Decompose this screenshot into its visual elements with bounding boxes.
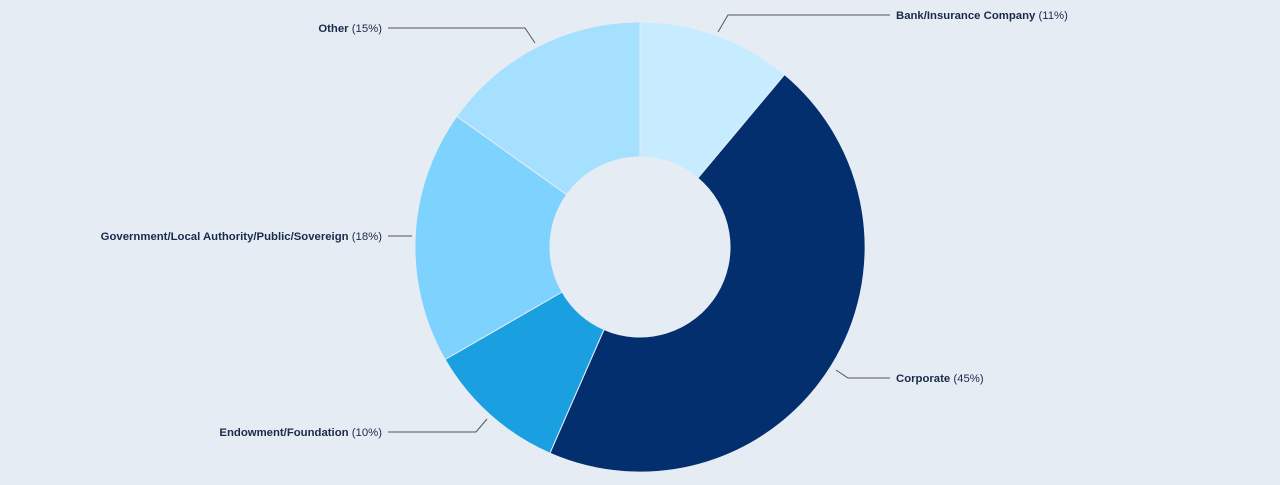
slice: Bank/Insurance Company	[640, 22, 785, 178]
slice: Other	[457, 22, 640, 195]
slice: Corporate	[550, 75, 865, 472]
label: Other: Other (15%)	[318, 23, 382, 35]
leader lines	[388, 15, 890, 432]
labels	[101, 10, 1068, 439]
label: Bank/Insurance Company: Bank/Insurance Company (11%)	[896, 10, 1068, 22]
donut chart	[415, 22, 865, 472]
label: Government: Government/Local Authority/Public/Sovereign (18%)	[101, 231, 382, 243]
label: Endowment/Foundation: Endowment/Foundation (10%)	[219, 427, 382, 439]
label: Corporate: Corporate (45%)	[896, 373, 984, 385]
slice: Endowment/Foundation	[445, 292, 604, 453]
slice: Government	[415, 116, 567, 360]
